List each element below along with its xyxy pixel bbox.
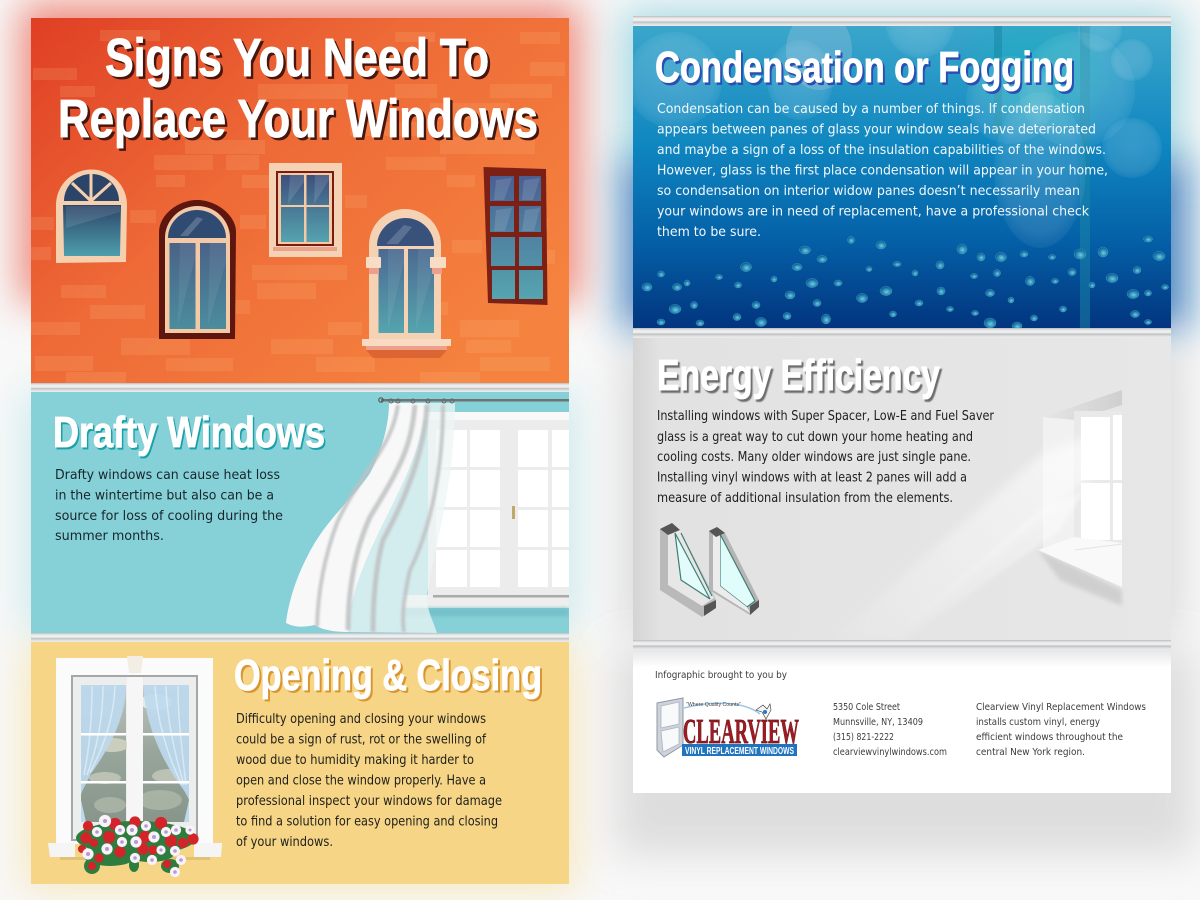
water droplets — [642, 236, 1168, 330]
panel: opening and closing — [31, 642, 569, 884]
text: address — [833, 702, 947, 758]
text: condensation: them to be sure. — [657, 225, 761, 240]
divider rail — [633, 328, 1171, 338]
title — [58, 28, 538, 149]
text: opening and closing: to find a solution for easy opening and closing — [236, 814, 498, 830]
flower box — [76, 816, 198, 876]
window 4: arched with sill — [362, 209, 451, 358]
text: brought to you by: Infographic brought to you by — [655, 670, 787, 681]
panel: footer — [633, 650, 1171, 793]
text: drafty windows — [55, 468, 283, 544]
text: company description: installs custom vinyl, energy — [976, 717, 1100, 728]
panel: condensation or fogging — [626, 0, 1171, 330]
text: opening and closing: wood due to humidity making it harder to — [236, 753, 474, 768]
text: energy efficiency — [657, 409, 994, 506]
text: condensation: appears between panes of glass your window seals have deteriorated — [657, 122, 1096, 138]
text: address: clearviewvinylwindows.com — [833, 747, 947, 758]
sunlit window — [940, 390, 1123, 606]
icon: triple pane section — [660, 523, 716, 617]
text: energy efficiency: cooling costs. Many older windows are just single pane. — [657, 450, 971, 465]
heading: opening and closing: Opening & Closing — [234, 651, 542, 700]
text: address: 5350 Cole Street — [833, 702, 900, 713]
window 5: red frame — [484, 167, 548, 305]
window 1: fan arch — [56, 170, 127, 263]
text: opening and closing — [236, 712, 502, 850]
text: opening and closing: of your windows. — [236, 835, 333, 850]
text: opening and closing: professional inspect your windows for damage — [236, 794, 502, 809]
text: condensation: However, glass is the first place condensation will appear in your home, — [657, 164, 1108, 178]
icon: double pane section — [709, 527, 759, 615]
text: opening and closing: open and close the window properly. Have a — [236, 774, 486, 788]
text: energy efficiency: measure of additional insulation from the elements. — [657, 491, 953, 506]
text: drafty windows: in the wintertime but also can be a — [55, 488, 274, 504]
panel: energy efficiency — [633, 338, 1171, 640]
white window — [403, 412, 569, 616]
text: condensation: Condensation can be caused by a number of things. If condensation — [657, 102, 1085, 117]
curtain rod — [379, 398, 569, 403]
text: address: Munnsville, NY, 13409 — [833, 717, 923, 728]
text: opening and closing: could be a sign of rust, rot or the swelling of — [236, 732, 486, 748]
white window with curtains — [48, 656, 222, 860]
text: energy efficiency: glass is a great way to cut down your home heating and — [657, 430, 973, 445]
title: Replace Your Windows — [58, 89, 538, 149]
text: company description: efficient windows throughout the — [976, 732, 1123, 743]
divider rail — [633, 640, 1171, 650]
text: condensation: and maybe a sign of a loss of the insulation capabilities of the windows. — [657, 143, 1106, 158]
text: opening and closing: Difficulty opening and closing your windows — [236, 712, 486, 727]
title: Signs You Need To — [105, 28, 489, 88]
text: company description: Clearview Vinyl Replacement Windows — [976, 702, 1146, 713]
text: condensation: so condensation on interior widow panes doesn’t necessarily mean — [657, 184, 1080, 199]
top rail right — [633, 16, 1171, 26]
curtain — [286, 403, 455, 633]
divider rail — [31, 633, 569, 642]
logo: clearview: CLEARVIEW — [683, 712, 799, 751]
text: company description: central New York region. — [976, 747, 1085, 758]
text: drafty windows: Drafty windows can cause heat loss — [55, 468, 280, 483]
text: drafty windows: summer months. — [55, 529, 164, 544]
brick texture — [30, 30, 565, 384]
text: drafty windows: source for loss of cooling during the — [55, 509, 283, 524]
heading: condensation or fogging: Condensation or Fogging — [655, 43, 1074, 92]
text: address: (315) 821-2222 — [833, 732, 894, 743]
text: company description — [976, 702, 1146, 758]
divider rail — [31, 383, 569, 392]
logo: clearview: "Where Quality Counts" — [686, 702, 741, 708]
window 2: dark arched — [159, 200, 236, 339]
text: energy efficiency: Installing vinyl windows with at least 2 panes will add a — [657, 470, 967, 486]
text: condensation — [657, 102, 1108, 240]
heading: energy efficiency: Energy Efficiency — [657, 351, 940, 400]
text: condensation: your windows are in need of replacement, have a professional check — [657, 204, 1089, 220]
panel: drafty windows — [31, 392, 569, 633]
logo: clearview — [657, 698, 799, 757]
panel: title on brick wall — [30, 18, 569, 384]
bokeh lights — [626, 0, 1168, 330]
heading: drafty windows: Drafty Windows — [53, 408, 325, 457]
text: energy efficiency: Installing windows with Super Spacer, Low-E and Fuel Saver — [657, 409, 994, 424]
logo: clearview: VINYL REPLACEMENT WINDOWS — [685, 746, 794, 757]
window 3: square cream — [269, 163, 342, 257]
